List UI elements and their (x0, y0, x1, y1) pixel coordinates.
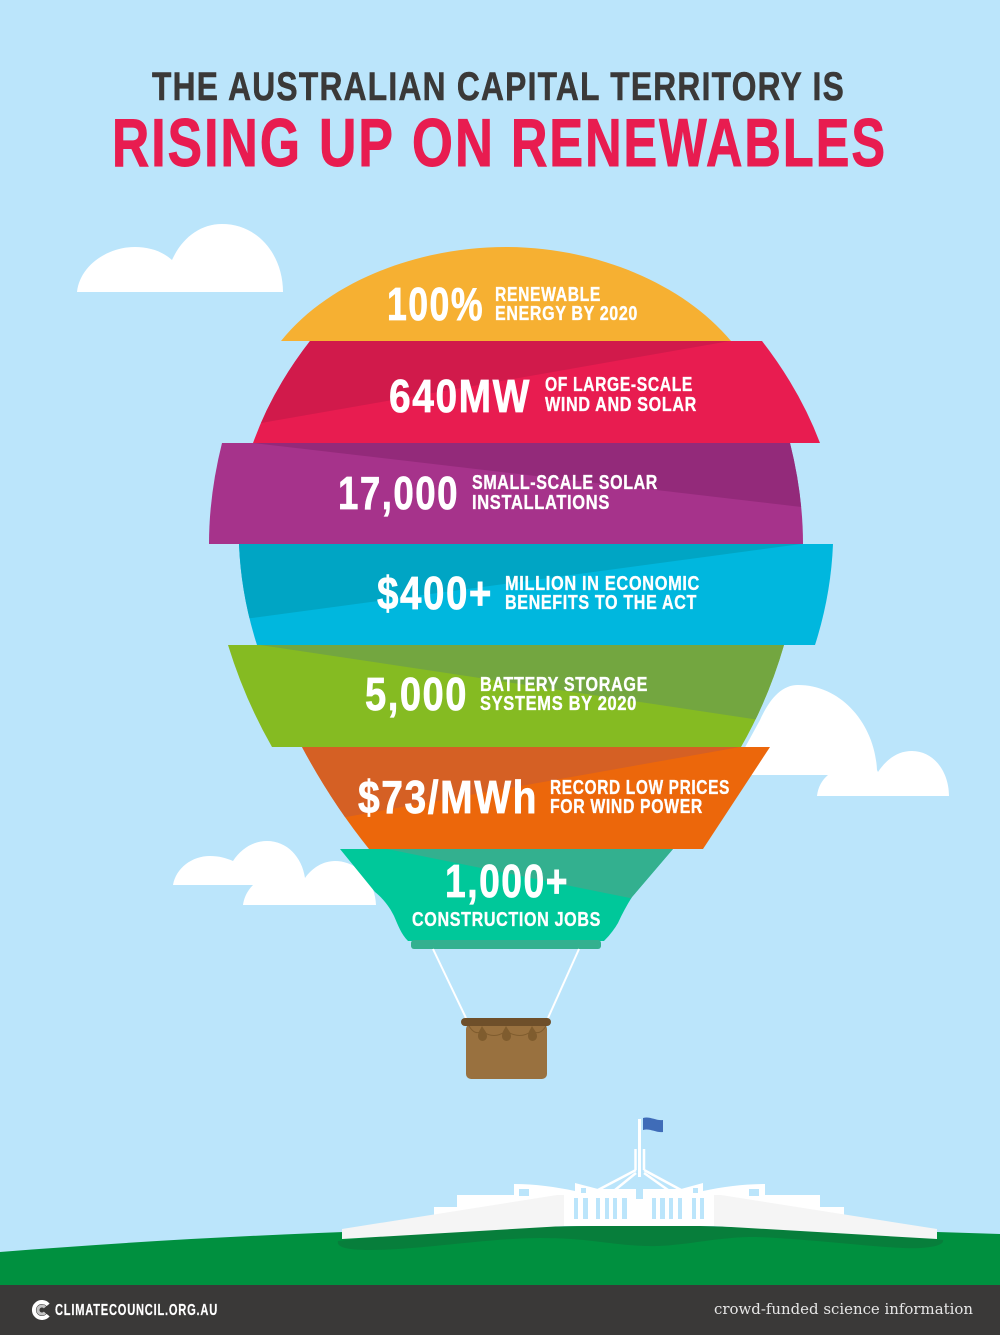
cloud: right (730, 685, 949, 796)
band: 100% renewable energy: ENERGY BY 2020 (495, 302, 638, 325)
tagline: crowd-funded science information (714, 1300, 973, 1318)
band: 1,000+ construction jobs: 1,000+ (445, 855, 569, 907)
band: $400+: BENEFITS TO THE ACT (505, 591, 697, 614)
band: $73/MWh (295, 747, 770, 849)
balloon ropes (433, 949, 579, 1018)
band: 1,000+ construction jobs (340, 849, 680, 941)
band: $73/MWh: FOR WIND POWER (550, 795, 703, 818)
logo mark (34, 1302, 48, 1318)
band: 5,000: SYSTEMS BY 2020 (480, 692, 637, 715)
cloud: top left (77, 224, 283, 292)
band: $400+: $400+ (377, 567, 493, 619)
building back (434, 1183, 844, 1226)
small windows (519, 1188, 759, 1196)
title: RISING (112, 105, 302, 181)
title: UP (319, 105, 395, 181)
flag (643, 1118, 663, 1132)
hot air balloon (209, 247, 833, 949)
band: 640MW (240, 341, 820, 443)
band: 1,000+ construction jobs: CONSTRUCTION JOBS (412, 908, 601, 931)
cloud: lower left (173, 841, 376, 905)
website: CLIMATECOUNCIL.ORG.AU (55, 1302, 218, 1319)
band: 5,000 (228, 645, 790, 747)
basket (461, 1018, 551, 1079)
band: 5,000: BATTERY STORAGE (480, 673, 648, 696)
band: 100% renewable energy: 100% (387, 278, 484, 330)
band: 5,000: 5,000 (365, 668, 468, 720)
band: 640MW: 640MW (389, 370, 531, 422)
hill shadow (338, 1226, 943, 1250)
flagpole and mast (598, 1119, 681, 1190)
balloon collar (411, 940, 601, 949)
green hill (0, 1226, 1000, 1285)
band: 640MW: OF LARGE-SCALE (545, 373, 693, 396)
band: 100% renewable energy (281, 247, 731, 341)
left wing (342, 1195, 564, 1239)
right wing (714, 1195, 937, 1239)
band: 640MW: WIND AND SOLAR (545, 393, 697, 416)
band: 100% renewable energy: RENEWABLE (495, 283, 601, 306)
band: 17,000 (209, 443, 810, 544)
title: ON (412, 105, 495, 181)
band: 17,000: SMALL-SCALE SOLAR (472, 471, 658, 494)
title (112, 65, 887, 181)
band: $73/MWh: $73/MWh (358, 771, 538, 823)
footer bar (0, 1285, 1000, 1335)
band: $73/MWh: RECORD LOW PRICES (550, 776, 730, 799)
band: $400+: MILLION IN ECONOMIC (505, 572, 700, 595)
band: 17,000: 17,000 (338, 467, 459, 519)
band: 17,000: INSTALLATIONS (472, 491, 610, 514)
band: $400+ (230, 544, 833, 645)
parliament house (342, 1118, 937, 1239)
facade columns (574, 1198, 704, 1219)
